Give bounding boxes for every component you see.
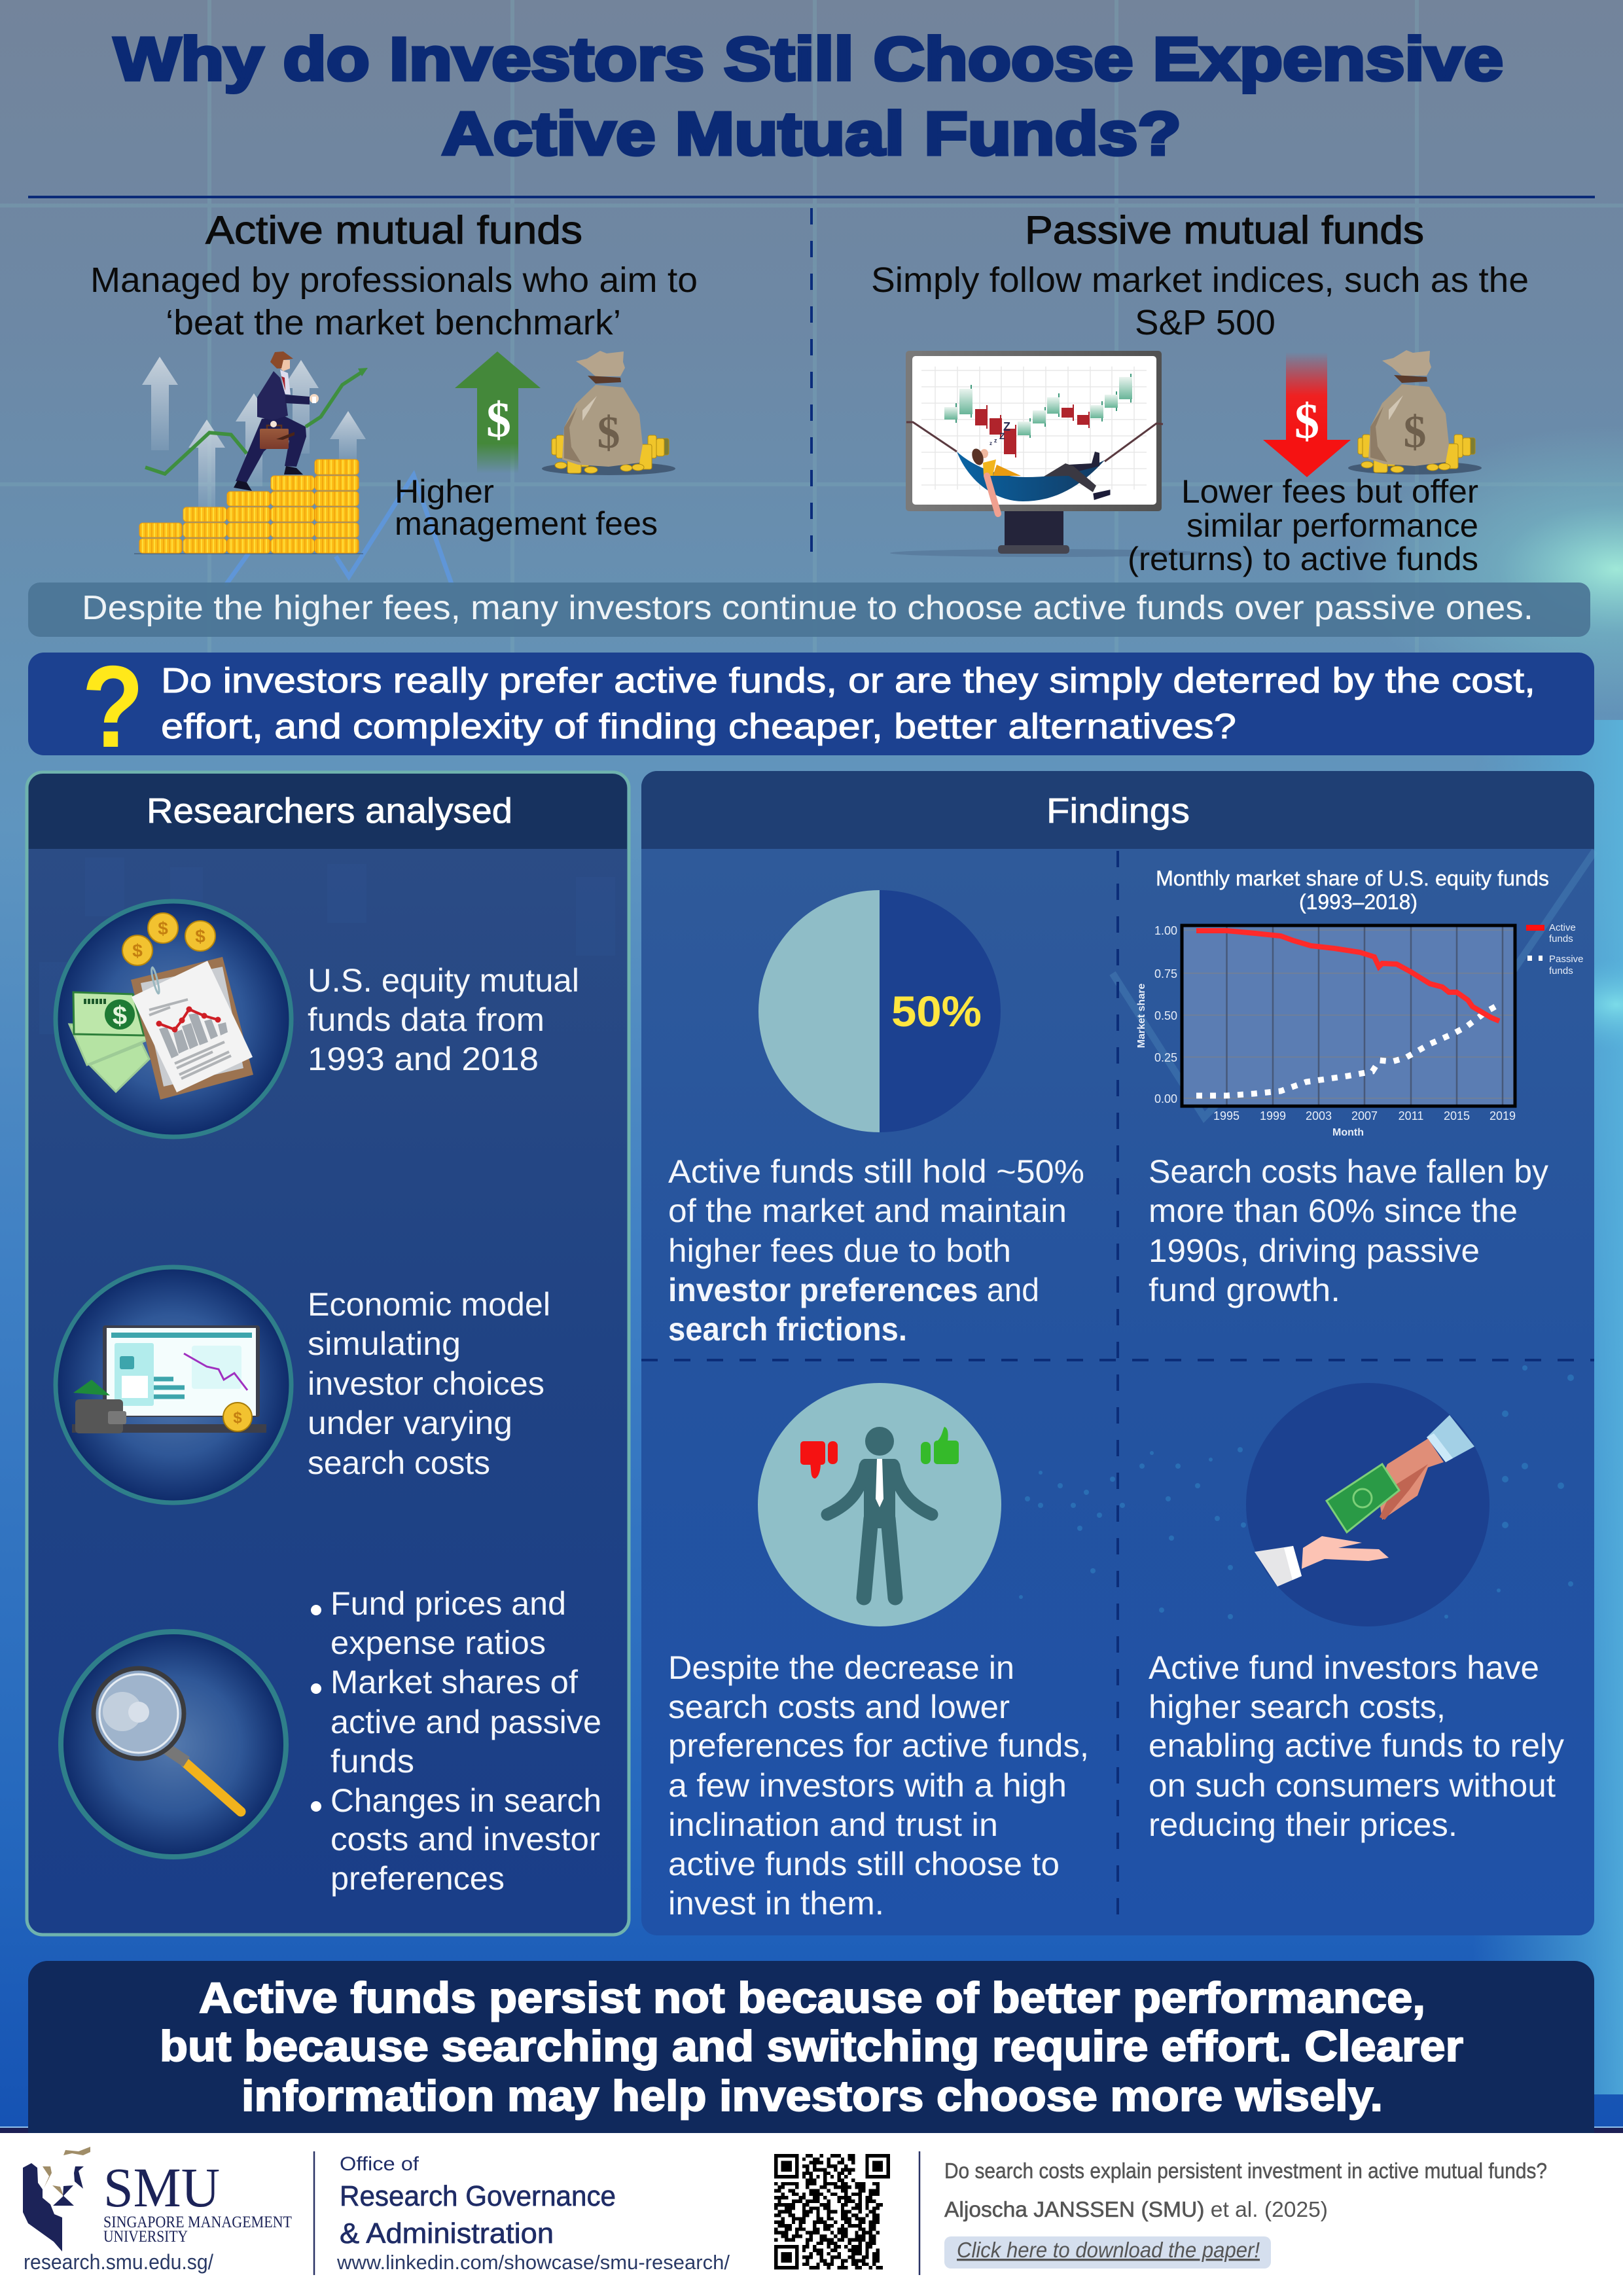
icon: red down arrow with dollar: $ (1294, 394, 1319, 449)
text: SMU wordmark: SMU (103, 2156, 220, 2219)
text: few investors: inclination and trust in (668, 1806, 998, 1843)
text: mutual funds data: U.S. equity mutual (308, 962, 579, 999)
text: higher management fees (395, 473, 658, 542)
icon: money bag with coins (1348, 350, 1482, 475)
text: question (161, 661, 1535, 746)
icon: thumbs up (921, 1427, 959, 1464)
text: search costs fallen (1149, 1153, 1548, 1308)
x axis labels: 2007 (1351, 1109, 1378, 1122)
text: higher search costs (1149, 1649, 1564, 1843)
x axis labels: 1999 (1260, 1109, 1286, 1122)
icon: green up arrow with dollar: $ (486, 393, 511, 448)
text: SMU wordmark: SINGAPORE MANAGEMENT (103, 2214, 292, 2231)
icon: laptop with wallet (56, 1267, 291, 1503)
text: lower fees: (returns) to active funds (1128, 541, 1478, 577)
heading: active mutual funds: Active mutual funds (205, 208, 582, 252)
title (114, 25, 1503, 168)
text: website: research.smu.edu.sg/ (24, 2250, 213, 2274)
text: paper reference: Do search costs explain persistent investment in active mutual funds? (944, 2159, 1547, 2183)
text: bullet list: Fund prices and (330, 1585, 566, 1622)
text: lower fees: similar performance (1186, 507, 1478, 544)
x axis labels (1213, 1109, 1516, 1122)
icon: hands exchanging money (1246, 1383, 1489, 1626)
legend (1526, 922, 1584, 977)
text: active definition: Managed by professionals who aim to (90, 260, 698, 300)
heading: findings: Findings (1046, 791, 1190, 831)
y axis labels: 0.25 (1154, 1051, 1177, 1064)
y axis labels: 0.75 (1154, 967, 1177, 980)
QR code (774, 2154, 890, 2270)
text: bullet list: preferences (330, 1860, 505, 1897)
panel: passive mutual funds (871, 208, 1529, 577)
conclusion banner: but because searching and switching require effort. Clearer (160, 2022, 1463, 2070)
text: lower fees (1128, 473, 1478, 577)
conclusion banner (0, 1961, 1623, 2134)
text: passive definition (871, 260, 1529, 342)
icon: laptop with wallet: $ (233, 1409, 242, 1427)
icon: money bag with coins: $ (1403, 407, 1427, 457)
axis titles (1136, 984, 1364, 1138)
text: passive definition: S&P 500 (1135, 303, 1275, 342)
icon: data clipboard with money: $ (113, 1001, 127, 1030)
conclusion banner: information may help investors choose more wisely. (241, 2072, 1383, 2120)
line chart: monthly market share (1136, 867, 1584, 1138)
text: paper reference: Aljoscha JANSSEN (SMU) et al. (2025) (944, 2197, 1328, 2221)
x axis labels: 2015 (1444, 1109, 1470, 1122)
pie chart: 50 percent: 50% (891, 987, 982, 1035)
text: office name: Office of (340, 2153, 419, 2175)
text: economic model: under varying (308, 1405, 512, 1441)
text: bullet list: active and passive (330, 1704, 601, 1740)
legend: Passive (1549, 954, 1584, 965)
heading: researchers analysed: Researchers analysed (147, 791, 512, 831)
text: few investors: invest in them. (668, 1885, 884, 1922)
text: office name: Research Governance (340, 2180, 616, 2212)
text: economic model: search costs (308, 1444, 490, 1481)
y axis labels: 0.50 (1154, 1009, 1177, 1022)
heading: passive mutual funds: Passive mutual funds (1025, 208, 1424, 252)
text: active funds hold: higher fees due to both (668, 1232, 1011, 1269)
icon: question mark: ? (82, 641, 144, 772)
text: active definition: ‘beat the market benchmark’ (166, 303, 621, 342)
chart title (1156, 867, 1549, 914)
text: active funds hold: investor preferences and (668, 1272, 1039, 1308)
text: bullet list: funds (330, 1743, 414, 1780)
x axis labels: 2003 (1306, 1109, 1332, 1122)
axis titles: Month (1332, 1127, 1364, 1138)
text: higher search costs: on such consumers without (1149, 1767, 1556, 1804)
text: higher search costs: higher search costs, (1149, 1689, 1446, 1725)
text: few investors: Despite the decrease in (668, 1649, 1014, 1686)
legend: Active (1549, 922, 1576, 933)
text: few investors: preferences for active funds, (668, 1727, 1089, 1764)
banner: despite the higher fees (28, 583, 1590, 637)
icon: red down arrow with dollar (1263, 352, 1351, 477)
text: higher management fees: Higher (395, 473, 494, 510)
banner: despite the higher fees: Despite the higher fees, many investors continue to choose active funds over passive ones. (82, 589, 1533, 627)
text: higher search costs: reducing their prices. (1149, 1806, 1457, 1843)
text: search costs fallen: fund growth. (1149, 1272, 1340, 1308)
x axis labels: 2019 (1489, 1109, 1516, 1122)
text: higher management fees: management fees (395, 505, 658, 542)
text: active definition (90, 260, 698, 342)
icon: businessman climbing coin stairs (134, 351, 368, 554)
text: higher search costs: enabling active funds to rely (1149, 1727, 1564, 1764)
text: mutual funds data: funds data from (308, 1001, 544, 1038)
icon: green up arrow with dollar (455, 351, 541, 473)
pie chart: 50 percent (758, 890, 1001, 1132)
text: search costs fallen: more than 60% since the (1149, 1193, 1518, 1229)
icon: thumbs down (800, 1441, 838, 1479)
text: mutual funds data: 1993 and 2018 (308, 1041, 539, 1077)
y axis labels (1154, 924, 1177, 1105)
title: Active Mutual Funds? (442, 99, 1181, 168)
icon: data clipboard with money: $ (132, 941, 143, 961)
icon: monitor with investor in hammock: Z (999, 431, 1005, 441)
text: economic model (308, 1286, 550, 1481)
icon: monitor with investor in hammock: z (990, 440, 992, 446)
text: question: effort, and complexity of finding cheaper, better alternatives? (161, 707, 1236, 746)
text: SMU wordmark: UNIVERSITY (103, 2228, 188, 2246)
text: economic model: simulating (308, 1325, 461, 1362)
text: few investors (668, 1649, 1089, 1922)
text: few investors: search costs and lower (668, 1689, 1010, 1725)
x axis labels: 2011 (1399, 1109, 1423, 1122)
text: bullet list: expense ratios (330, 1624, 546, 1661)
y axis labels: 1.00 (1154, 924, 1177, 937)
callout: research question (28, 641, 1594, 772)
text: search costs fallen: 1990s, driving passive (1149, 1232, 1480, 1269)
panel: researchers analysed (27, 772, 629, 1935)
text: lower fees: Lower fees but offer (1181, 473, 1478, 510)
text: bullet list: Market shares of (330, 1664, 578, 1700)
icon: money bag with coins (542, 351, 675, 475)
y axis labels: 0.00 (1154, 1092, 1177, 1105)
icon: monitor with investor in hammock (890, 351, 1204, 557)
icon: monitor with investor in hammock: Z (1003, 420, 1010, 433)
conclusion banner: Active funds persist not because of better performance, (199, 1973, 1425, 2022)
text: passive definition: Simply follow market indices, such as the (871, 260, 1529, 300)
text: linkedin: www.linkedin.com/showcase/smu-research/ (336, 2251, 730, 2274)
footer (0, 2133, 1623, 2296)
icon: magnifying glass (61, 1632, 286, 1857)
text: active funds hold: Active funds still hold ~50% (668, 1153, 1084, 1190)
panel: active mutual funds (90, 208, 698, 554)
text: mutual funds data (308, 962, 579, 1077)
text: bullet list: costs and investor (330, 1821, 600, 1857)
icon: money bag with coins: $ (597, 408, 620, 458)
panel: findings (641, 771, 1595, 1935)
text: active funds hold (668, 1153, 1084, 1348)
icon: person with thumbs (758, 1383, 1001, 1626)
text: economic model: investor choices (308, 1365, 544, 1402)
text: active funds hold: of the market and maintain (668, 1193, 1067, 1229)
icon: data clipboard with money: $ (158, 918, 168, 939)
text: office name (340, 2153, 616, 2250)
chart title: Monthly market share of U.S. equity funds (1156, 867, 1549, 890)
text: higher search costs: Active fund investors have (1149, 1649, 1539, 1686)
icon: monitor with investor in hammock: z (994, 437, 997, 444)
legend: funds (1549, 965, 1573, 977)
text: bullet list (311, 1585, 601, 1897)
text: economic model: Economic model (308, 1286, 550, 1323)
text: few investors: a few investors with a high (668, 1767, 1067, 1804)
x axis labels: 1995 (1213, 1109, 1240, 1122)
text: SMU wordmark (103, 2156, 292, 2246)
text: active funds hold: search frictions. (668, 1311, 907, 1348)
text: search costs fallen: Search costs have fallen by (1149, 1153, 1548, 1190)
text: few investors: active funds still choose to (668, 1846, 1060, 1882)
legend: funds (1549, 933, 1573, 944)
text: bullet list: Changes in search (330, 1782, 601, 1819)
axis titles: Market share (1136, 984, 1147, 1048)
text: paper reference (944, 2159, 1547, 2221)
title: Why do Investors Still Choose Expensive (114, 25, 1503, 93)
button: download paper: Click here to download the paper! (957, 2238, 1260, 2262)
text: office name: & Administration (340, 2217, 554, 2250)
icon: data clipboard with money (56, 901, 291, 1137)
text: question: Do investors really prefer active funds, or are they simply deterred by the cost, (161, 661, 1535, 700)
icon: SMU logo (23, 2147, 90, 2251)
icon: data clipboard with money: $ (195, 926, 205, 946)
chart title: (1993–2018) (1299, 890, 1418, 914)
